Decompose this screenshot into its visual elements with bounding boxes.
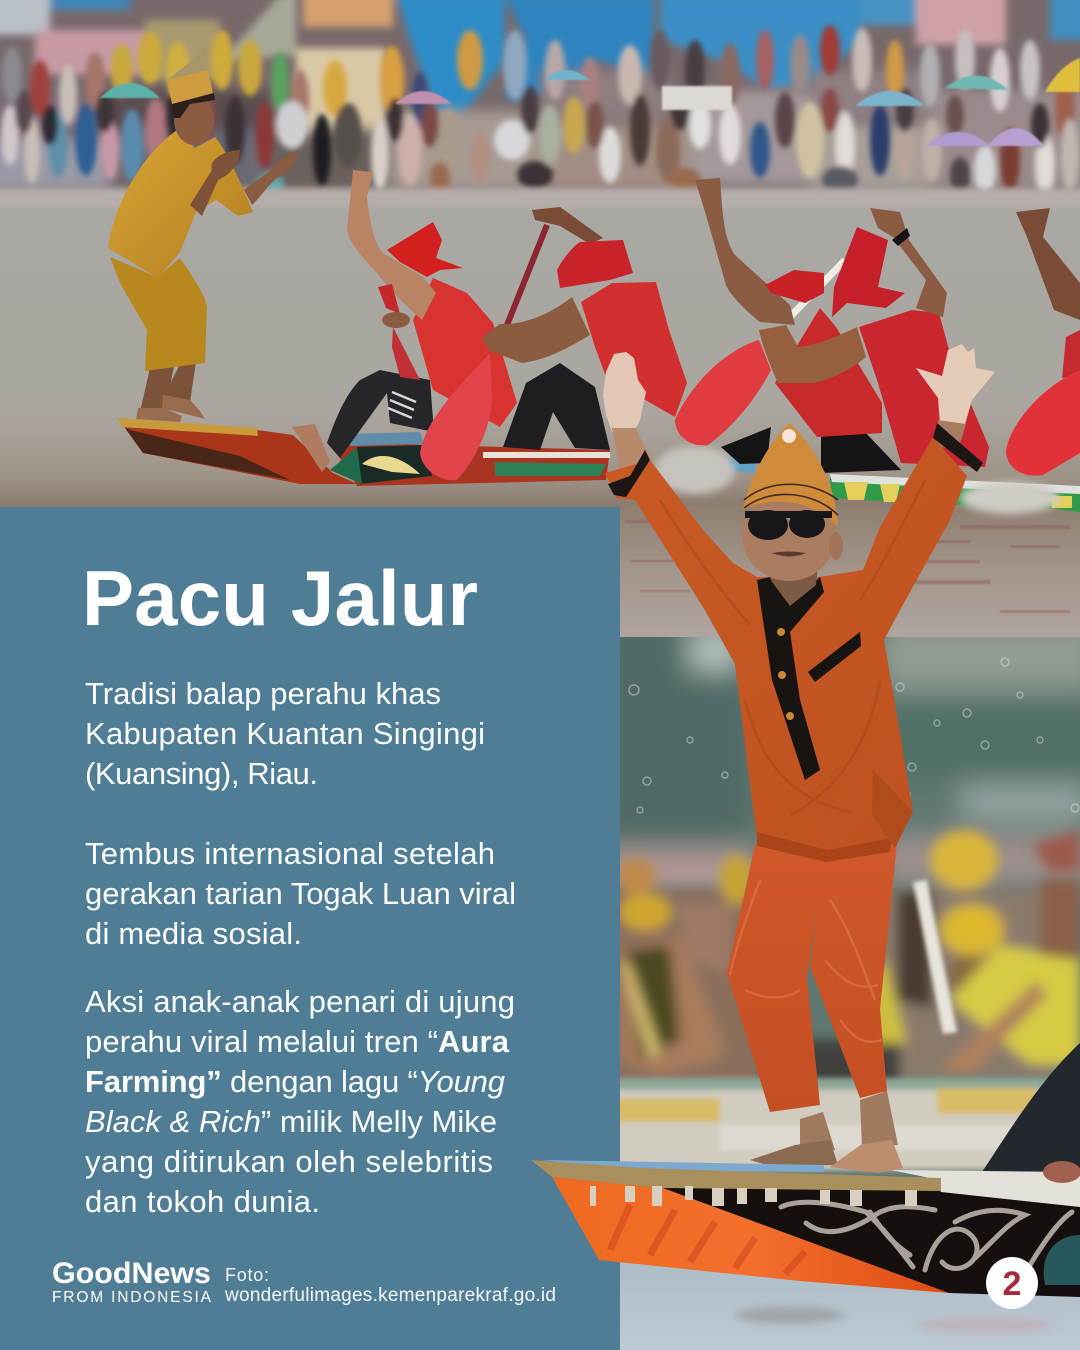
- text block: aura farming: Farming” dengan lagu “Young: [85, 1064, 505, 1099]
- near arm and hand: [190, 150, 240, 216]
- paddle shaft: [504, 224, 550, 324]
- left forearm: [612, 428, 650, 482]
- upper arm and hand: [532, 207, 603, 244]
- shirt tail fold: [872, 770, 913, 848]
- orange hull: [552, 1177, 949, 1293]
- red head scarf: [387, 222, 463, 277]
- white paddle shaft: [913, 880, 957, 1034]
- photo credit: wonderfulimages.kemenparekraf.go.id: [224, 1285, 556, 1306]
- title: Pacu Jalur: [82, 554, 478, 642]
- text block: aura farming: Aksi anak-anak penari di ujung: [85, 984, 515, 1019]
- river bank strip: [0, 188, 1080, 208]
- text block: aura farming: dan tokoh dunia.: [85, 1184, 320, 1219]
- head: [174, 95, 214, 145]
- text block: international fame: gerakan tarian Togak Luan viral: [85, 876, 516, 911]
- blue text panel: [0, 507, 620, 1350]
- arms: [695, 178, 795, 325]
- bottom right photo: rowers in yellow, blurred: [600, 620, 1080, 1350]
- first paddler in red vest: [327, 170, 517, 458]
- black placket and collar: [757, 577, 824, 780]
- dense background spectators: [0, 70, 1080, 190]
- paddler leg at right edge: [982, 1043, 1080, 1172]
- first boat with painted hull: [118, 418, 610, 486]
- black trousers: [327, 370, 434, 458]
- watch: [892, 228, 910, 246]
- tents and backdrop: [0, 0, 1080, 148]
- raised arm: [347, 170, 436, 320]
- neck: [764, 565, 818, 606]
- red shirts: [775, 308, 882, 437]
- text block: intro: [85, 676, 485, 791]
- far arm and hand: [244, 150, 298, 205]
- text block: aura farming: yang ditirukan oleh selebritis: [85, 1144, 493, 1179]
- paddle blade: [420, 353, 492, 480]
- paddle blade: [675, 340, 771, 445]
- logo: GoodNews from Indonesia: [52, 1257, 212, 1306]
- feet: [750, 1140, 838, 1166]
- page number badge: 2: [1003, 1265, 1021, 1303]
- tassels: [590, 1186, 917, 1206]
- text block: intro: (Kuansing), Riau.: [85, 756, 318, 791]
- logo: GoodNews from Indonesia: FROM INDONESIA: [52, 1289, 212, 1306]
- cuffs: [608, 450, 650, 497]
- white deck: [891, 1170, 1080, 1207]
- boy dancer in gold on the first boat: [108, 45, 298, 422]
- buttons: [777, 628, 785, 636]
- boy dancer in orange with sunglasses: [603, 344, 995, 1173]
- page number badge: [986, 1257, 1038, 1309]
- gold trousers: [110, 257, 207, 371]
- photo credit: [224, 1265, 556, 1306]
- right group of paddlers and boat: [655, 178, 1080, 514]
- crown hat: [167, 70, 213, 104]
- text block: intro: Kabupaten Kuantan Singingi: [85, 716, 485, 751]
- text block: aura farming: perahu viral melalui tren “Aura: [85, 1024, 510, 1059]
- head scarf: [557, 240, 633, 288]
- spectator crowd on the river bank: [0, 0, 1080, 200]
- hand on deck: [1043, 1161, 1080, 1183]
- ankles: [800, 1091, 898, 1158]
- shirt folds: [660, 480, 925, 815]
- left raised hand: [603, 352, 646, 436]
- far right paddler: [1016, 208, 1080, 320]
- lower paddle: [392, 327, 420, 380]
- text block: aura farming: [85, 984, 515, 1219]
- head scarves: [765, 270, 824, 303]
- shirt with sleeves: [605, 437, 967, 860]
- right raised hand: [916, 344, 995, 428]
- logo: GoodNews from Indonesia: GoodNews: [52, 1257, 211, 1290]
- feet: [136, 395, 205, 422]
- mouth: [772, 552, 806, 556]
- second paddler and red paddle: [420, 207, 687, 480]
- paddle shaft: [790, 260, 845, 317]
- black carved hull: [663, 1186, 1080, 1297]
- red shirt: [581, 282, 687, 417]
- gold jacket: [108, 130, 253, 278]
- top photo: paddlers racing on the river: [0, 0, 1080, 637]
- pocket: [808, 632, 861, 682]
- text block: international fame: di media sosial.: [85, 916, 302, 951]
- background foliage: [600, 620, 1080, 890]
- text block: aura farming: Black & Rich” milik Melly Mike: [85, 1104, 497, 1139]
- gold rim: [531, 1160, 941, 1191]
- legs: [141, 364, 196, 408]
- trousers: [727, 843, 897, 1112]
- text block: intro: Tradisi balap perahu khas: [85, 676, 441, 711]
- text block: international fame: Tembus internasional setelah: [85, 836, 495, 871]
- sunglasses: [745, 510, 832, 540]
- water and splash strip: [600, 1078, 1080, 1170]
- photo credit: Foto:: [225, 1265, 269, 1285]
- blurred rowers: [600, 830, 1080, 1090]
- teal marking at hull end: [1044, 1235, 1080, 1285]
- text block: international fame: [85, 836, 516, 951]
- trouser folds: [730, 880, 882, 1042]
- head and ears: [742, 489, 836, 581]
- water splash: [655, 446, 735, 494]
- waist sash: [757, 832, 892, 862]
- lower hand: [382, 312, 410, 328]
- river water: [0, 195, 1080, 637]
- far boat stripes: [725, 457, 755, 473]
- water below the boat: [620, 1258, 1080, 1350]
- red vest: [413, 278, 517, 427]
- head cloth behind arm: [378, 284, 400, 314]
- silver carvings: [781, 1202, 1072, 1270]
- lower arm: [482, 297, 590, 363]
- hat: [743, 423, 838, 527]
- blue deck: [541, 1160, 824, 1172]
- right forearm: [936, 420, 966, 450]
- umbrellas in the crowd: [100, 58, 1080, 146]
- water droplets: [629, 658, 1079, 813]
- carved boat under the dancer: [531, 1160, 1080, 1297]
- black speckled trousers: [503, 363, 610, 450]
- blurred spectators: [1, 25, 1079, 197]
- trousers: [721, 427, 901, 473]
